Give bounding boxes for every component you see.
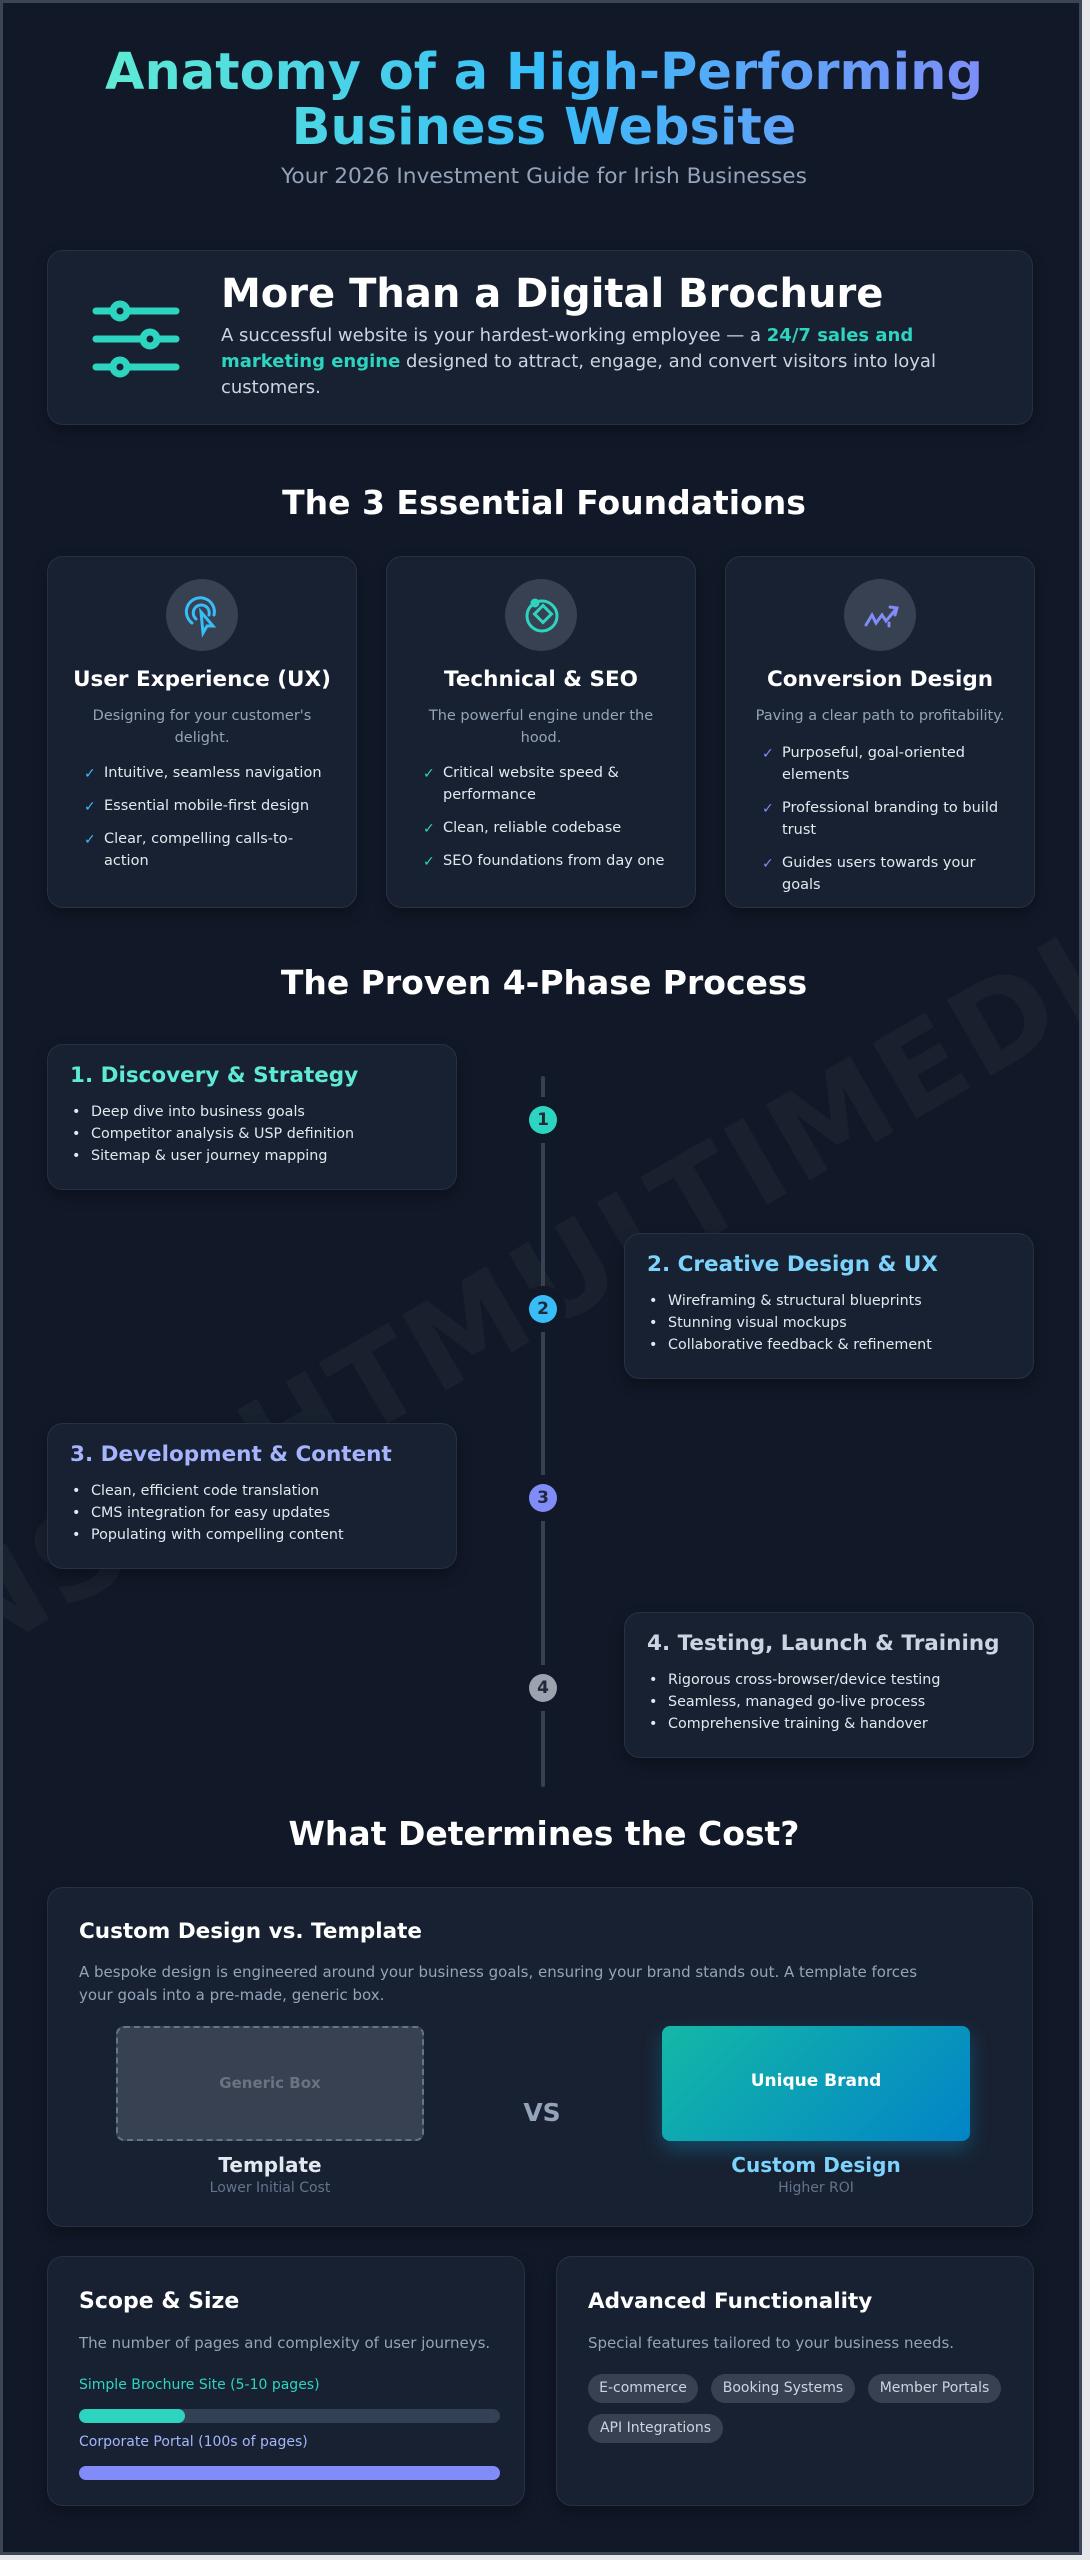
generic box: Generic Box [219,2074,321,2092]
phase 4 card: Seamless, managed go-live process [668,1694,925,1710]
list: Professional branding to build trust [782,800,998,838]
label template: Lower Initial Cost [210,2180,330,2196]
unique brand box [662,2026,970,2141]
list: ✓ [84,832,96,848]
marker 4 [529,1674,557,1702]
phase 2 card: 2. Creative Design & UX [647,1252,938,1277]
label custom: Higher ROI [778,2180,854,2196]
panel: UX [47,556,357,908]
phase 1 card: 1. Discovery & Strategy [70,1063,358,1088]
label template: Template [218,2153,322,2177]
panel: conversion [725,556,1035,908]
vs: VS [523,2098,561,2127]
list: Intuitive, seamless navigation [104,765,322,781]
phase 3 card [47,1423,457,1569]
list: ✓ [762,801,774,817]
list: ✓ [762,746,774,762]
title: Anatomy of a High-Performing [105,43,983,102]
list: ✓ [84,799,96,815]
marker 3: 3 [537,1488,549,1508]
phase 1 card: Competitor analysis & USP definition [91,1126,354,1142]
list: Essential mobile-first design [104,798,309,814]
list: SEO foundations from day one [443,853,664,869]
marker 4: 4 [537,1678,549,1698]
panel: functionality: Advanced Functionality [588,2289,872,2314]
heading: More Than a Digital Brochure [221,271,883,317]
list: ✓ [84,766,96,782]
marker 1 [529,1106,557,1134]
icon: pointer [166,579,238,651]
feature pills: E-commerce [599,2380,687,2396]
list: Clean, reliable codebase [443,820,621,836]
phase 1 card: Sitemap & user journey mapping [91,1148,327,1164]
subtitle: Your 2026 Investment Guide for Irish Businesses [281,164,807,189]
bar 2: Corporate Portal (100s of pages) [79,2434,308,2450]
list: Critical website speed & performance [443,765,619,803]
feature pills: API Integrations [600,2420,711,2436]
panel: scope [47,2256,525,2506]
panel: functionality: Special features tailored to your business needs. [588,2334,954,2352]
phase 4 card: Comprehensive training & handover [668,1716,928,1732]
subtitle: The powerful engine under the hood. [429,708,653,746]
phase 3 card: CMS integration for easy updates [91,1505,330,1521]
heading: process: The Proven 4-Phase Process [281,963,807,1002]
heading: foundations: The 3 Essential Foundations [282,483,806,522]
list [762,745,998,893]
icon: tag [505,579,577,651]
phase 3 card: 3. Development & Content [70,1442,392,1467]
title [3,45,1085,155]
feature pills [588,2374,1001,2443]
marker 3 [529,1484,557,1512]
phase 4 card: 4. Testing, Launch & Training [647,1631,1000,1656]
list: Guides users towards your goals [782,855,976,893]
list [423,765,664,870]
title: Business Website [292,98,796,157]
generic box [116,2026,424,2141]
phase 3 card: Clean, efficient code translation [91,1483,319,1499]
icon: chart [844,579,916,651]
marker 1: 1 [537,1110,549,1130]
title: User Experience (UX) [73,667,331,692]
title: Conversion Design [767,667,993,692]
list: ✓ [423,854,435,870]
text: A successful website is your hardest-working employee — a 24/7 sales and marketing engine designed to attract, engage, and convert visitors into loyal customers. [221,325,936,398]
panel: scope: The number of pages and complexity of user journeys. [79,2334,490,2352]
marker 2 [529,1295,557,1323]
timeline line [541,1076,545,1787]
phase 4 card [624,1612,1034,1758]
heading: cost: What Determines the Cost? [289,1814,799,1853]
label custom: Custom Design [731,2153,901,2177]
phase 2 card: Collaborative feedback & refinement [668,1337,932,1353]
list: ✓ [423,766,435,782]
marker 2: 2 [537,1299,549,1319]
phase 2 card: Wireframing & structural blueprints [668,1293,922,1309]
title: Technical & SEO [444,667,638,692]
icon: sliders [92,300,180,378]
list: ✓ [762,856,774,872]
description: A bespoke design is engineered around your business goals, ensuring your brand stands out. A template forces your goals into a pre-made, generic box. [79,1963,917,2004]
panel: functionality [556,2256,1034,2506]
feature pills: Booking Systems [723,2380,843,2396]
list: Clear, compelling calls-to-action [104,831,293,869]
label custom [731,2153,901,2196]
phase 2 card [624,1233,1034,1379]
phase 2 card: Stunning visual mockups [668,1315,847,1331]
unique brand box: Unique Brand [751,2071,881,2091]
subtitle: Designing for your customer's delight. [93,708,311,746]
phase 4 card: Rigorous cross-browser/device testing [668,1672,940,1688]
list: Purposeful, goal-oriented elements [782,745,965,783]
phase 1 card: Deep dive into business goals [91,1104,305,1120]
label template [210,2153,330,2196]
list: ✓ [423,821,435,837]
panel: intro [47,250,1033,425]
subtitle: Paving a clear path to profitability. [756,708,1004,724]
phase 1 card [47,1044,457,1190]
title: Custom Design vs. Template [79,1919,422,1944]
phase 3 card: Populating with compelling content [91,1527,344,1543]
feature pills: Member Portals [880,2380,989,2396]
panel: scope: Scope & Size [79,2289,239,2314]
bar 1: Simple Brochure Site (5-10 pages) [79,2377,320,2393]
list [84,765,322,869]
panel: technical [386,556,696,908]
panel: custom vs template [47,1887,1033,2227]
